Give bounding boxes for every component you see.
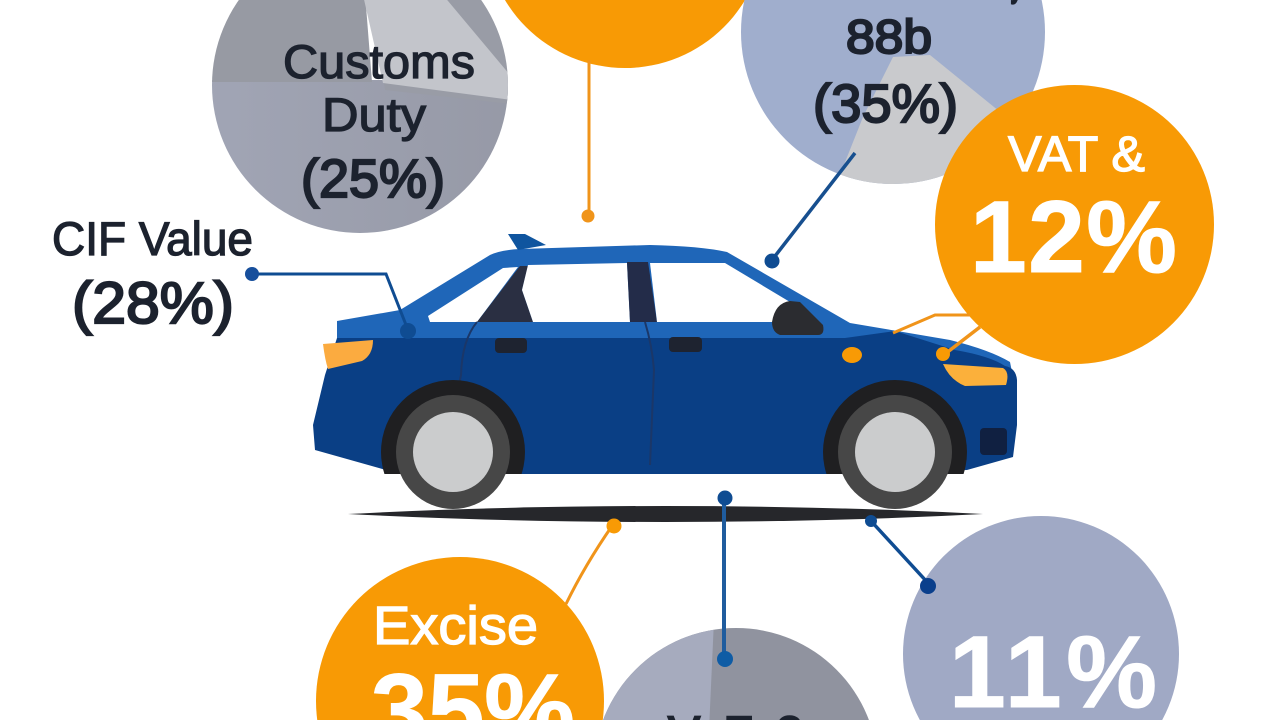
side mirror [772, 301, 823, 335]
panel: customs duty circle [205, 0, 520, 240]
middle window [522, 263, 630, 322]
rear wheel [396, 395, 510, 509]
connector: top orange circle to car [582, 60, 594, 222]
connector: blue circle to roof [764, 153, 855, 268]
front headlight [943, 364, 1007, 386]
rear window [428, 267, 518, 322]
label: top right value [813, 0, 1025, 134]
door handles [495, 337, 702, 353]
rear pillar [477, 266, 533, 322]
label: excise: Excise [373, 596, 538, 656]
panel: top right blue circle [741, 0, 1045, 184]
roof fin [508, 234, 546, 250]
label: VAT: VAT & [1008, 126, 1145, 182]
panel: lower right blue circle [903, 516, 1179, 720]
panel: excise circle [316, 557, 604, 720]
connector: centre line [717, 490, 733, 667]
bumper vent [980, 428, 1007, 455]
front window [650, 263, 790, 322]
label: customs duty: (25%) [301, 149, 445, 209]
label: customs duty: Duty [322, 88, 427, 141]
label: CIF value [52, 212, 253, 336]
door pillar [627, 262, 657, 322]
panel: bottom grey circle [603, 628, 869, 720]
label: customs duty: Customs [283, 35, 475, 88]
wheel arches [381, 380, 967, 474]
value: 12%: 12% [970, 180, 1177, 294]
label: CIF value: (28%) [72, 271, 234, 336]
car lower body [313, 331, 1017, 474]
door seams [459, 322, 654, 465]
rear light [323, 340, 373, 369]
connector: VAT circle to hood [842, 315, 980, 363]
label: top right value: 88b [846, 10, 932, 63]
label: CIF value: CIF Value [52, 212, 253, 265]
label: top right value: (35%) [813, 74, 958, 134]
illustration: blue car [313, 234, 1017, 524]
front wheel [838, 395, 952, 509]
car roof and window frame [337, 245, 1012, 372]
panel: VAT circle [935, 85, 1214, 364]
label: customs duty [283, 35, 475, 209]
panel: top orange circle [485, 0, 765, 68]
connector: lower right circle to car [865, 515, 936, 594]
ground shadow [348, 506, 983, 522]
connector: CIF value to car [245, 267, 416, 339]
connector: excise circle to car [566, 518, 622, 604]
